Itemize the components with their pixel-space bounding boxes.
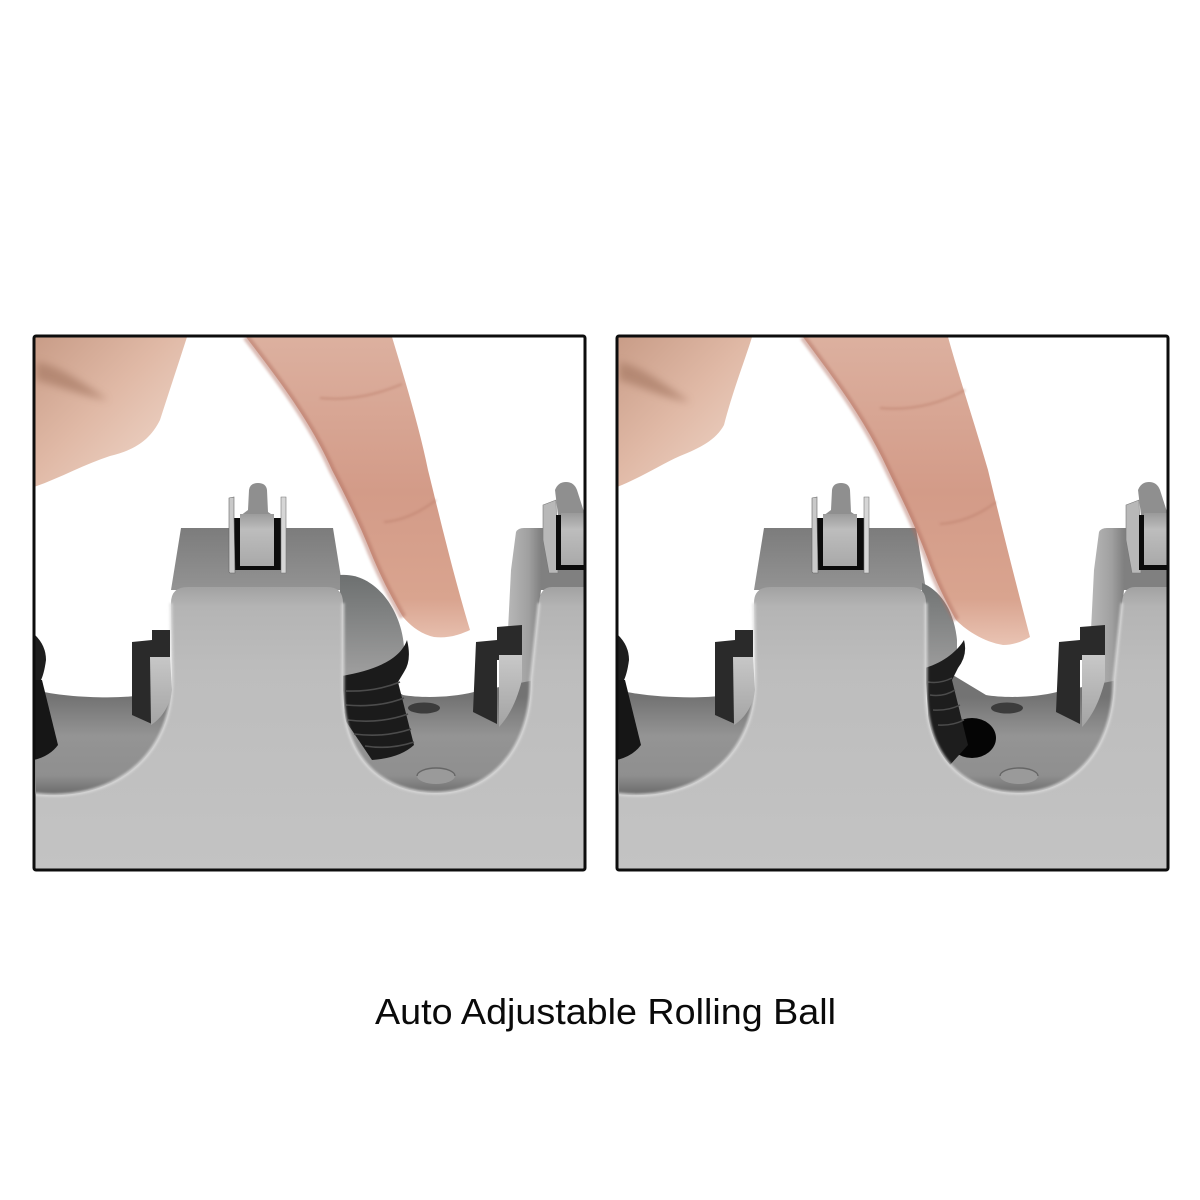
rubber collar and spring bbox=[342, 640, 414, 760]
hand bbox=[34, 337, 187, 487]
panel: right frame, ball pressed down bbox=[617, 336, 1173, 872]
sharpening pads bbox=[132, 625, 522, 727]
compressed spring bbox=[925, 640, 968, 765]
hand bbox=[617, 337, 752, 487]
frame border bbox=[617, 336, 1168, 870]
index finger bbox=[803, 337, 1030, 645]
device back faces and floor bbox=[36, 528, 590, 800]
frame border bbox=[34, 336, 585, 870]
floor opening bbox=[959, 718, 996, 758]
panel: left frame, finger pressing the rolling ball bbox=[34, 336, 590, 872]
caption: Auto Adjustable Rolling Ball bbox=[375, 991, 836, 1032]
sharpening pads bbox=[715, 625, 1105, 727]
left edge spring bbox=[617, 634, 641, 760]
lowered ball dome bbox=[922, 583, 957, 668]
device front body bbox=[34, 587, 590, 872]
left edge spring bbox=[34, 634, 58, 760]
device back faces and floor bbox=[619, 528, 1173, 800]
sharpener clips bbox=[812, 482, 1169, 573]
sharpener clips bbox=[229, 482, 586, 573]
device front body bbox=[617, 587, 1173, 872]
index finger bbox=[246, 337, 470, 637]
rolling ball dome bbox=[340, 574, 404, 676]
